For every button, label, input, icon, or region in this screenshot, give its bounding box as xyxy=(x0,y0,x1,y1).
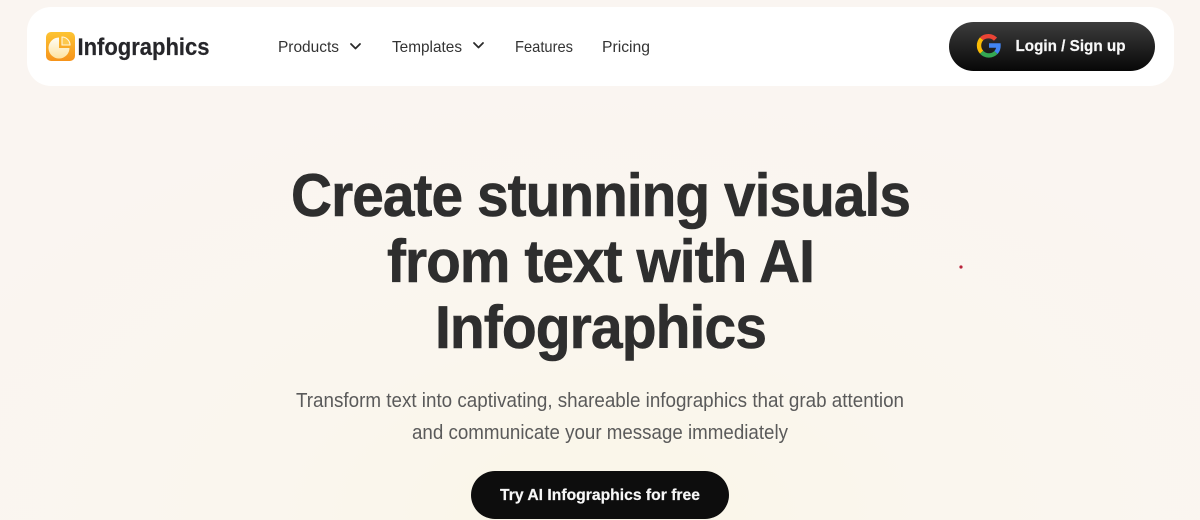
call to action button xyxy=(471,471,729,519)
nav: Features: Features xyxy=(515,39,573,56)
logo wordmark: Infographics xyxy=(78,34,210,61)
icon: orange pie chart xyxy=(46,32,75,61)
nav links xyxy=(278,39,650,56)
button label: Try AI Infographics for free xyxy=(500,487,700,504)
logo xyxy=(46,32,210,61)
login label: Login / Sign up xyxy=(1016,38,1126,55)
heading line 1: Create stunning visuals xyxy=(291,162,910,229)
subtitle line 1: Transform text into captivating, shareable infographics that grab attention xyxy=(296,390,904,412)
heading line 2: from text with AI xyxy=(387,228,814,295)
hero subtitle xyxy=(296,390,904,444)
heading line 3: Infographics xyxy=(435,294,766,361)
nav: Products: Products xyxy=(278,39,339,56)
nav: Templates: Templates xyxy=(392,39,462,56)
icon: Google G xyxy=(979,36,999,55)
subtitle line 2: and communicate your message immediately xyxy=(412,422,788,444)
nav: Pricing: Pricing xyxy=(602,39,650,56)
login button xyxy=(949,22,1155,71)
hero heading xyxy=(291,162,910,361)
navigation bar xyxy=(27,7,1174,86)
red cursor dot xyxy=(959,265,963,269)
